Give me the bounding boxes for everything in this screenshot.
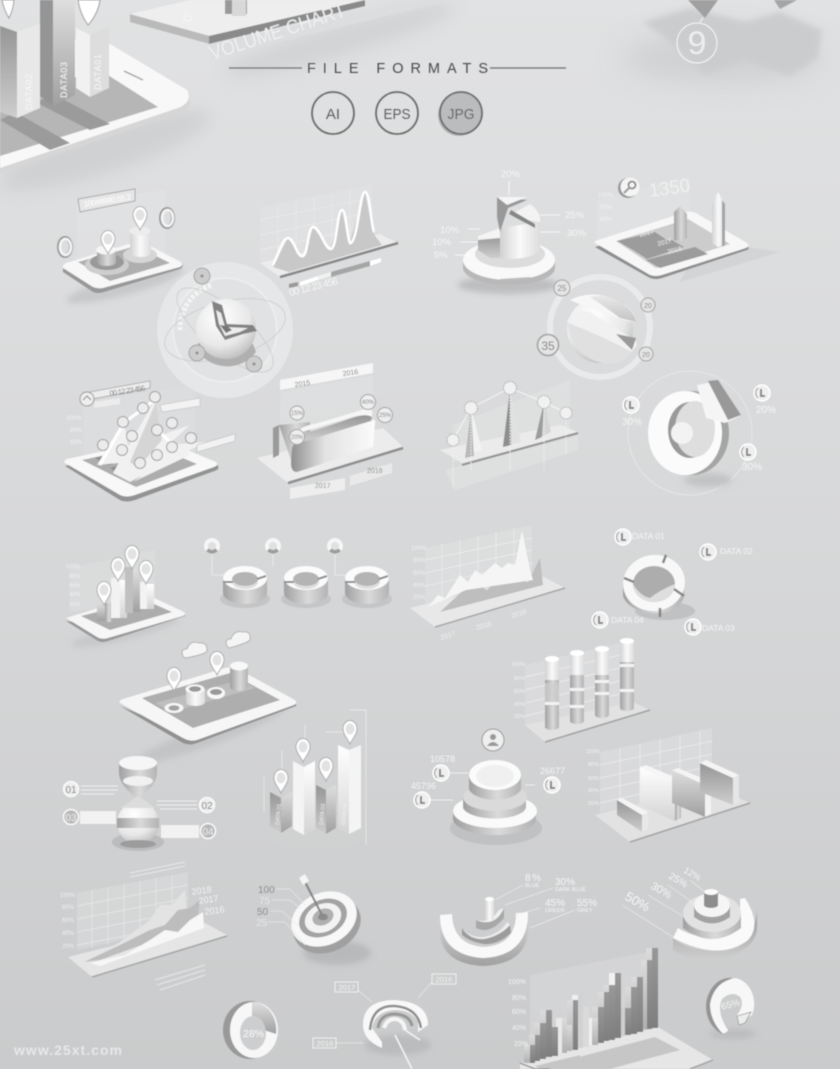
bullet 03	[64, 810, 116, 824]
percent axis: 100%	[66, 564, 80, 570]
year 2016: 2016	[342, 369, 359, 378]
value badges: 20	[644, 303, 652, 310]
grey arrow bar	[674, 206, 687, 241]
timer box: 00 12 23 456	[109, 383, 146, 398]
percent axis: 40%	[413, 583, 426, 589]
grey series	[84, 900, 200, 962]
percent axis: 100%	[60, 893, 76, 899]
tablet 1350 bars	[595, 175, 780, 282]
format badge AI	[312, 92, 354, 134]
data badges: DATA 04	[611, 615, 644, 625]
light series	[85, 890, 188, 962]
clouds	[182, 632, 250, 658]
bar three	[316, 785, 336, 834]
bullet 01	[64, 782, 118, 796]
bars	[524, 948, 658, 1063]
timer box	[90, 381, 150, 399]
raised wedge	[497, 197, 535, 232]
ring info badges: 30%	[742, 462, 762, 473]
data badges: DATA 03	[702, 623, 735, 633]
percent axis: 60%	[512, 1009, 526, 1016]
percent axis: 60%	[69, 583, 80, 589]
year labels	[191, 884, 225, 917]
percent axis	[66, 416, 83, 446]
percent axis: 60%	[70, 440, 83, 446]
value badges: 25	[558, 284, 567, 293]
rim shadow	[197, 343, 256, 366]
format badge JPG: JPG	[448, 106, 474, 123]
score labels: 75	[259, 896, 271, 907]
bullet 04	[161, 824, 216, 838]
people badges: 26677	[540, 766, 565, 776]
tablet with cylinders	[119, 632, 296, 772]
percent axis: 100%	[511, 662, 525, 668]
laptop keyboard	[520, 1027, 713, 1069]
year labels: 2016	[476, 621, 493, 632]
percent axis	[411, 546, 427, 601]
back ribbon	[296, 409, 372, 440]
percent labels: 10%	[440, 225, 460, 236]
value 1350: 1350	[648, 175, 691, 202]
ring one	[220, 566, 270, 608]
centre column	[485, 897, 494, 920]
bar two	[293, 761, 315, 835]
percent axis: 100%	[411, 546, 427, 552]
percent axis: 20%	[62, 944, 75, 950]
bar labels: DATA 02	[297, 804, 305, 825]
pins	[274, 720, 357, 793]
percent axis: 80%	[69, 574, 80, 580]
data labels	[24, 54, 103, 110]
three segmented rings	[204, 538, 392, 608]
heart wedge	[212, 301, 257, 340]
percent axis: 60%	[62, 918, 75, 924]
value badges: 40%	[362, 400, 375, 406]
panel D	[700, 760, 739, 805]
rotated percents: 50%	[622, 889, 653, 915]
legend values	[525, 873, 597, 914]
score labels	[256, 885, 275, 929]
percent axis: 20%	[413, 595, 426, 601]
percent axis	[508, 979, 528, 1048]
bar DATA01	[76, 26, 109, 97]
percent axis: 60%	[588, 776, 599, 782]
column four	[620, 638, 634, 711]
gear badge	[618, 178, 640, 198]
white series	[90, 912, 204, 966]
timer label: 00 12 23 456	[288, 276, 340, 299]
panel B	[640, 765, 681, 821]
panel C	[672, 768, 711, 817]
column two	[570, 650, 584, 724]
label box: 100#8990.55.2	[83, 192, 132, 209]
panel bar chart	[586, 728, 750, 842]
donut 65 percent	[706, 978, 756, 1039]
year labels: 2016	[511, 609, 528, 620]
percent axis: 20%	[514, 1041, 528, 1048]
wave line	[273, 192, 374, 265]
bar four	[338, 745, 361, 834]
percent axis: 40%	[512, 1025, 526, 1032]
donut 28 percent	[223, 1001, 278, 1059]
year labels: 2017	[198, 893, 219, 906]
caption strip	[130, 862, 205, 990]
format badge EPS: EPS	[384, 106, 410, 123]
year labels: 2017	[657, 237, 673, 248]
score labels: 100	[258, 885, 275, 896]
data labels: DATA02	[24, 74, 34, 110]
grey series	[440, 558, 543, 612]
year boxes	[313, 974, 456, 1048]
percent labels: 25%	[565, 210, 585, 221]
panel A	[617, 798, 648, 832]
right cylinder stack	[123, 226, 157, 263]
orbit nodes	[189, 268, 262, 372]
body cylinder	[500, 222, 540, 259]
concentric half rings	[440, 873, 597, 966]
lower labels	[290, 463, 392, 499]
percent axis: 20%	[514, 714, 525, 720]
badge 9: 9	[688, 25, 706, 61]
legend values: DARK BLUE	[555, 887, 587, 893]
percent axis: 40%	[69, 592, 80, 598]
year labels	[440, 609, 528, 642]
percent labels: 30%	[567, 228, 587, 239]
percent labels: 10%	[432, 237, 452, 248]
left cylinder stack	[85, 246, 129, 275]
legend values: 8%	[525, 873, 541, 884]
percent axis	[66, 564, 80, 608]
year boxes: 2017	[339, 983, 355, 992]
value badges	[538, 280, 655, 361]
bullet 03: 03	[65, 813, 77, 824]
ring with data labels	[592, 529, 753, 635]
format badge AI: AI	[326, 106, 340, 123]
hourglass	[64, 756, 216, 851]
ribbon chart	[257, 363, 403, 499]
bars	[97, 567, 154, 622]
orbit sphere	[157, 262, 293, 398]
percent axis: 100%	[66, 416, 82, 422]
rotated percents: 30%	[648, 880, 674, 902]
white series	[428, 530, 533, 607]
ring three	[342, 566, 392, 608]
home badge	[80, 392, 120, 408]
phone with bars and pins	[66, 546, 185, 653]
maze ring	[313, 974, 456, 1069]
callouts	[160, 398, 235, 452]
cylinders	[164, 662, 248, 713]
white arrow bar	[712, 192, 725, 247]
wave line chart	[260, 184, 398, 299]
rotated percents	[622, 865, 703, 915]
year boxes: 2016	[436, 975, 452, 984]
data badges: DATA 02	[720, 546, 753, 556]
top-right pie chart with badge 9	[622, 0, 822, 82]
year labels: 2018	[667, 245, 683, 256]
data badges	[592, 529, 753, 635]
data labels: DATA01	[93, 54, 103, 90]
year boxes: 2016	[317, 1039, 333, 1048]
sphere slices	[570, 294, 636, 322]
column chart	[511, 638, 650, 742]
tablet mountain chart	[64, 381, 235, 502]
percent axis	[598, 193, 614, 223]
bullet 02: 02	[201, 801, 213, 812]
percent axis: 60%	[514, 689, 525, 695]
bar DATA03	[40, 0, 75, 106]
column one	[545, 656, 559, 730]
pins	[101, 206, 147, 254]
year labels: 2016	[204, 904, 225, 917]
target with arrow	[256, 874, 371, 965]
percent axis: 40%	[514, 702, 525, 708]
year labels: 2017	[639, 228, 655, 239]
bullet 01: 01	[65, 785, 77, 796]
value badges	[290, 394, 392, 444]
legend values: BLUE	[525, 883, 540, 889]
percent axis: 80%	[512, 995, 526, 1002]
percent axis: 80%	[514, 676, 525, 682]
score labels: 50	[257, 907, 269, 918]
data badges: DATA 01	[632, 531, 665, 541]
multi-year area chart	[60, 862, 227, 990]
leader lines	[455, 181, 560, 255]
percent axis: 40%	[62, 931, 75, 937]
year 2015: 2015	[294, 380, 311, 389]
wave area	[273, 192, 382, 272]
percent axis: 100%	[586, 749, 600, 755]
ring info badges	[622, 385, 776, 473]
sphere body	[196, 299, 256, 359]
front ribbon	[291, 420, 375, 472]
bar labels: DATA 03	[319, 804, 327, 825]
rotated percents: 12%	[682, 865, 703, 883]
percent axis: 60%	[413, 571, 426, 577]
spikes	[465, 390, 551, 458]
percent axis: 20%	[588, 801, 599, 807]
raised segment	[697, 380, 741, 423]
legend values: GREEN	[545, 908, 565, 914]
bullet 02	[157, 798, 214, 812]
legend values: 30%	[555, 877, 575, 888]
chart zero label: 0°	[180, 10, 195, 22]
people badges: 45796	[411, 781, 436, 791]
3D pie chart	[432, 169, 587, 294]
legend values: 55%	[577, 898, 597, 909]
pins	[97, 546, 153, 605]
ring two	[281, 566, 331, 608]
percent axis: 20%	[69, 602, 80, 608]
percent axis: 100%	[598, 193, 614, 199]
legend values: GREY	[577, 908, 593, 914]
stacked cake chart	[411, 729, 565, 845]
rotated percents: 25%	[666, 871, 689, 891]
score labels: 25	[256, 918, 268, 929]
percent axis: 60%	[600, 217, 613, 223]
column three	[595, 646, 609, 718]
top-left phone with data bars	[0, 0, 216, 205]
laptop bar chart	[508, 948, 713, 1069]
phone with stacked cylinders	[59, 189, 186, 310]
white mountains	[97, 400, 205, 482]
small rings	[59, 209, 173, 256]
percent axis: 80%	[588, 762, 599, 768]
people badges: 10578	[430, 754, 455, 764]
value badges: 35	[541, 339, 555, 353]
value badges: 20	[642, 352, 650, 359]
file formats heading: FILE FORMATS	[307, 61, 488, 77]
pins on bars	[2, 0, 100, 25]
percent axis: 80%	[70, 428, 83, 434]
percent axis: 40%	[588, 788, 599, 794]
people badges	[411, 729, 565, 808]
dark strips	[617, 232, 708, 268]
donut value: 65%	[720, 997, 742, 1013]
line area chart	[410, 525, 565, 642]
format badge EPS	[376, 92, 418, 134]
percent axis	[511, 662, 525, 720]
centre cylinder	[704, 889, 718, 908]
dotted markers	[447, 382, 572, 488]
bar labels: DATA 04	[341, 804, 349, 825]
3D open ring	[622, 371, 776, 495]
percent axis	[60, 893, 76, 950]
lower labels: 2018	[367, 468, 383, 475]
year labels: 2018	[191, 884, 212, 897]
data strips	[289, 258, 381, 288]
legend values: 45%	[545, 898, 565, 909]
data labels: DATA03	[59, 62, 69, 98]
percent labels	[432, 169, 587, 261]
lower labels: 2017	[315, 483, 331, 490]
sliced sphere	[538, 277, 655, 377]
watermark: www.25xt.com	[13, 1042, 122, 1058]
dark prism	[273, 422, 310, 463]
value badges: 15%	[291, 411, 304, 417]
volume chart plate	[130, 0, 460, 88]
percent axis: 100%	[508, 979, 526, 986]
value badges: 20%	[291, 435, 304, 441]
bar labels: DATA 01	[275, 804, 283, 825]
pin bar chart	[262, 710, 373, 848]
pins	[167, 652, 224, 691]
percent labels: 20%	[501, 169, 521, 180]
bar labels	[275, 804, 349, 825]
arrow	[299, 874, 323, 917]
bar one	[270, 792, 292, 833]
percent axis: 80%	[600, 205, 613, 211]
spike chart	[440, 380, 578, 490]
ring info badges: 20%	[756, 405, 776, 416]
ring tower	[622, 865, 757, 959]
percent axis: 80%	[62, 905, 75, 911]
donut value: 28%	[243, 1028, 264, 1040]
percent axis: 80%	[413, 558, 426, 564]
percent axis	[586, 749, 600, 807]
bar DATA02	[0, 24, 40, 118]
ring minis	[204, 538, 347, 575]
ring info badges: 30%	[622, 417, 642, 428]
year labels	[639, 228, 683, 256]
low wedge	[478, 235, 500, 258]
bullet 04: 04	[202, 827, 214, 838]
percent labels: 5%	[434, 250, 448, 261]
value badges	[98, 392, 196, 468]
format badge JPG	[438, 92, 482, 136]
badge 9	[677, 18, 717, 63]
year labels: 2017	[440, 631, 457, 642]
value badges: 25%	[379, 413, 392, 419]
